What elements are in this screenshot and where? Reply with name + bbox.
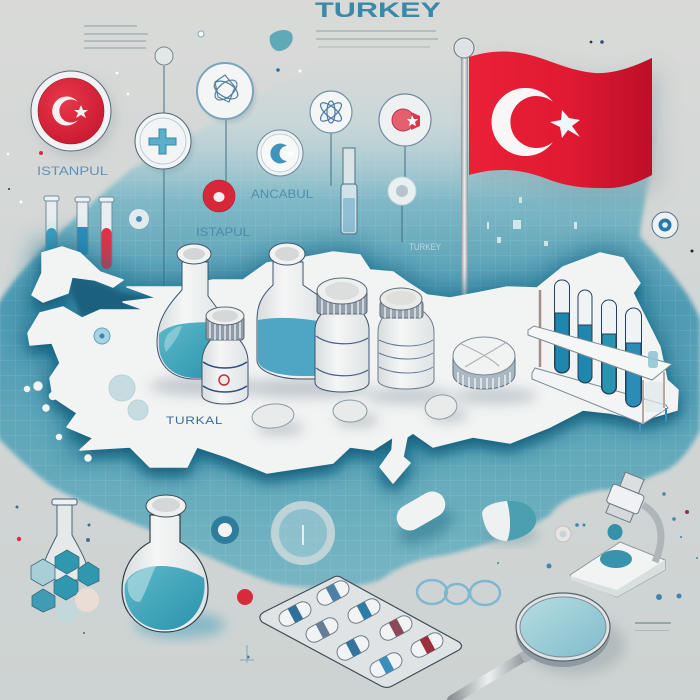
flask tall on map	[257, 243, 325, 379]
label: Turkal: TURKAL	[166, 415, 223, 427]
icon: red apple dot	[203, 180, 235, 212]
pills on map	[251, 392, 459, 430]
white bottle	[315, 278, 369, 392]
flag pole	[454, 38, 474, 328]
decorative drop icon top	[7, 30, 693, 252]
icon: ring marker right	[652, 212, 678, 238]
test tube rack	[528, 280, 672, 434]
blister capsules	[276, 578, 446, 680]
vial	[341, 148, 357, 234]
small specks lower left	[16, 506, 254, 663]
small specks lower right	[497, 492, 698, 600]
icon: molecule badge	[197, 63, 256, 123]
Marmara sea dark	[72, 278, 150, 318]
flag shadow	[476, 64, 660, 199]
magnifying glass	[452, 593, 625, 700]
icon: plus badge	[135, 113, 194, 173]
small ring	[555, 526, 571, 542]
ghost circles on map	[109, 375, 148, 420]
linked rings	[417, 580, 500, 605]
soft shadows under objects	[150, 376, 537, 435]
pin on map	[94, 328, 110, 344]
caption lines top left	[84, 25, 148, 49]
blister pack	[260, 576, 462, 688]
microscope	[570, 470, 665, 597]
map wide shadow	[28, 247, 678, 483]
specks on teal	[487, 197, 577, 246]
icon: small ring marker	[129, 209, 149, 229]
label: small Turkey: TURKEY	[409, 242, 441, 252]
icon: white circle node	[388, 177, 416, 205]
red dot	[237, 589, 253, 605]
connector lines	[164, 66, 405, 290]
map of Turkey	[24, 247, 678, 483]
map shadow	[28, 255, 678, 491]
label: Istanpul: ISTANPUL	[37, 164, 108, 178]
icon: top knob	[155, 47, 173, 65]
big round tablet	[453, 337, 515, 389]
icon: flag badge	[379, 94, 431, 146]
half capsule	[482, 501, 538, 544]
white bottle two	[378, 288, 434, 389]
icon: moon badge	[257, 130, 303, 176]
flask on map	[157, 244, 226, 379]
big round flask	[122, 495, 225, 638]
caption lines under title	[316, 30, 438, 48]
test tubes top left	[44, 196, 114, 269]
hexagon flask	[31, 499, 99, 623]
white capsule	[392, 487, 459, 551]
icon: atom badge	[310, 91, 352, 133]
label: Istapul: ISTAPUL	[196, 225, 250, 239]
small bottle with red dot	[202, 307, 248, 404]
ring disc	[275, 505, 331, 561]
label: Ancabul: ANCABUL	[251, 187, 313, 201]
Turkish flag	[469, 51, 652, 188]
caption lines lower right	[635, 622, 671, 631]
teal region with grid	[0, 98, 700, 590]
icon: red crescent badge	[31, 71, 115, 157]
teal ball	[211, 516, 239, 544]
